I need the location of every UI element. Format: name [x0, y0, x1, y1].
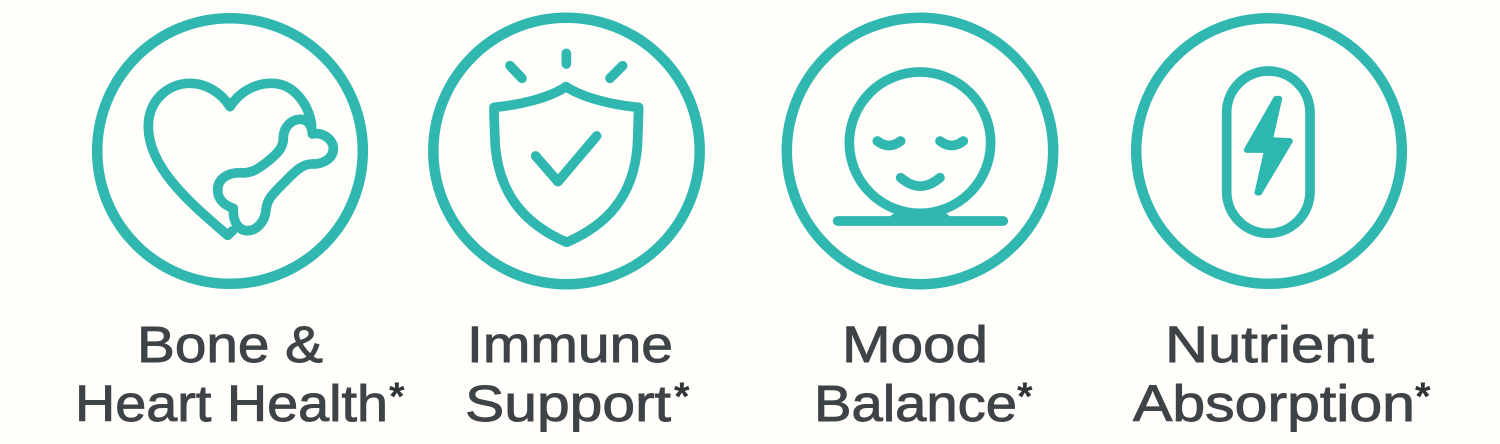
label: mood balance: *	[1017, 375, 1033, 419]
label: bone and heart health: Heart Health	[75, 375, 388, 432]
label: bone and heart health: Bone &	[137, 316, 323, 373]
label: immune support: Immune	[467, 316, 673, 373]
icon: calm smiling face	[787, 18, 1053, 284]
label: nutrient absorption	[1133, 316, 1431, 432]
label: bone and heart health	[75, 316, 405, 432]
label: immune support	[465, 316, 690, 432]
label: immune support: *	[674, 375, 690, 419]
icon: capsule with lightning bolt	[1136, 18, 1402, 284]
label: mood balance	[814, 316, 1033, 432]
label: mood balance: Balance	[814, 375, 1017, 432]
icon: shield with check	[433, 18, 700, 284]
label: immune support: Support	[465, 375, 671, 432]
label: bone and heart health: *	[389, 375, 405, 419]
label: mood balance: Mood	[842, 316, 988, 373]
icon: heart and bone	[97, 18, 363, 284]
label: nutrient absorption: *	[1415, 375, 1431, 419]
label: nutrient absorption: Absorption	[1133, 375, 1415, 432]
label: nutrient absorption: Nutrient	[1165, 316, 1374, 373]
